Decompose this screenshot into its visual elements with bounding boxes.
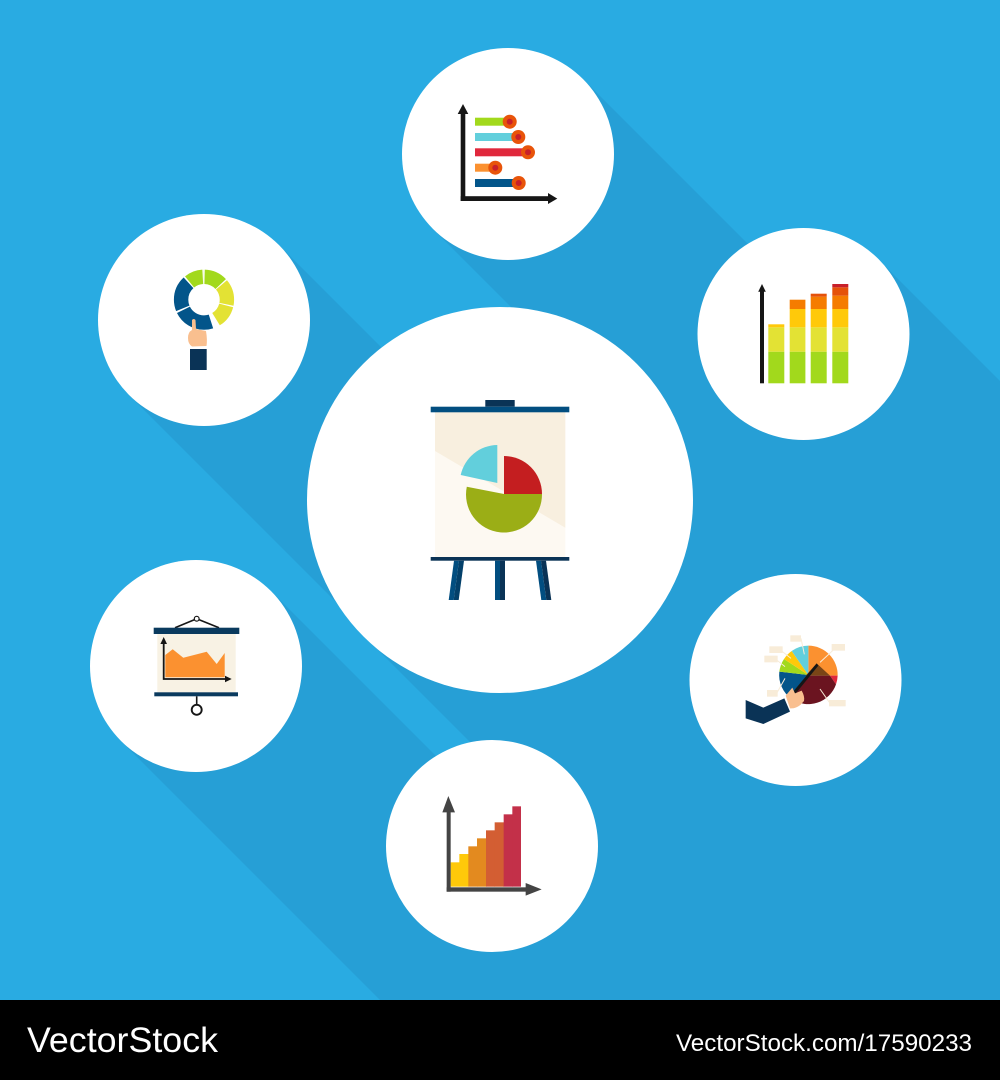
icon: donut chart with pointing hand xyxy=(181,277,227,370)
long shadows of the circles xyxy=(121,79,1000,1000)
icon: rising step bar chart xyxy=(442,796,542,896)
icon: hand pointing at pie chart xyxy=(746,635,846,724)
white circles xyxy=(90,48,910,952)
icon: projector screen with area chart xyxy=(154,616,239,715)
icon: stacked bar chart with arrow xyxy=(758,284,848,383)
icon: horizontal bar chart with dots xyxy=(458,104,557,204)
footer image id text: VectorStock.com/17590233 xyxy=(676,1030,972,1057)
footer bar xyxy=(0,1000,1000,1080)
footer logo text: VectorStock xyxy=(27,1021,219,1060)
icon: easel with pie chart xyxy=(431,400,569,600)
